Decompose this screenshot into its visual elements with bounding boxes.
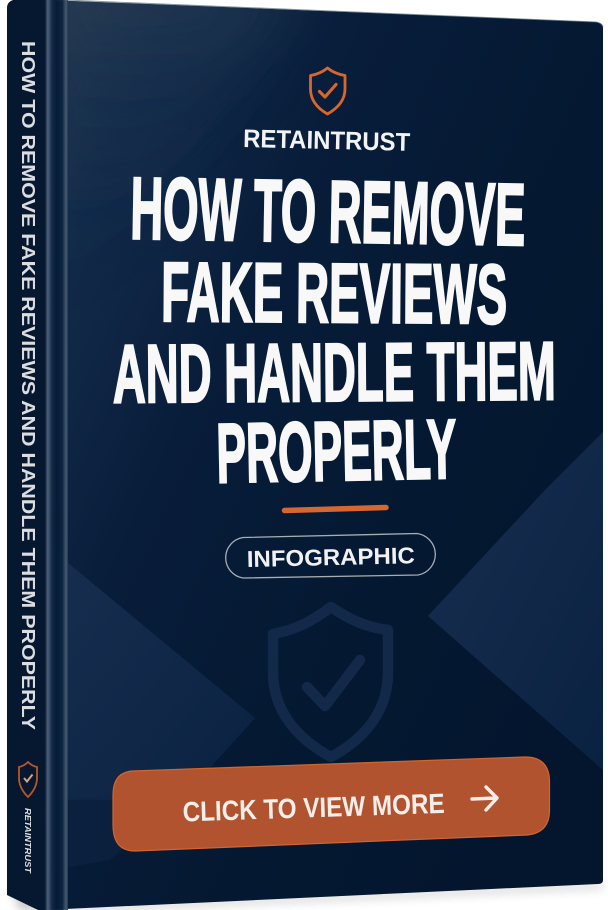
badge: infographic <box>226 534 435 578</box>
spine hinge ridges <box>45 0 68 910</box>
panel: spine <box>7 0 50 910</box>
icon: arrow <box>472 787 497 810</box>
badge: infographic: INFOGRAPHIC <box>247 542 415 572</box>
icon: watermark shield <box>273 607 388 757</box>
button: click to view more: CLICK TO VIEW MORE <box>182 788 445 827</box>
icon: spine shield <box>19 762 37 797</box>
button: click to view more <box>113 757 550 851</box>
icon: brand shield <box>310 68 345 114</box>
top edge highlight <box>66 0 603 27</box>
title <box>112 159 556 501</box>
background facet: right <box>428 432 603 770</box>
book drop shadow <box>12 884 603 910</box>
background facet: left <box>50 548 255 800</box>
top-left sheen <box>68 0 267 56</box>
accent divider <box>284 508 386 510</box>
spine brand: RETAINTRUST <box>23 808 33 874</box>
brand name: RETAINTRUST <box>243 125 411 157</box>
spine title: HOW TO REMOVE FAKE REVIEWS AND HANDLE THEM PROPERLY <box>18 41 38 730</box>
